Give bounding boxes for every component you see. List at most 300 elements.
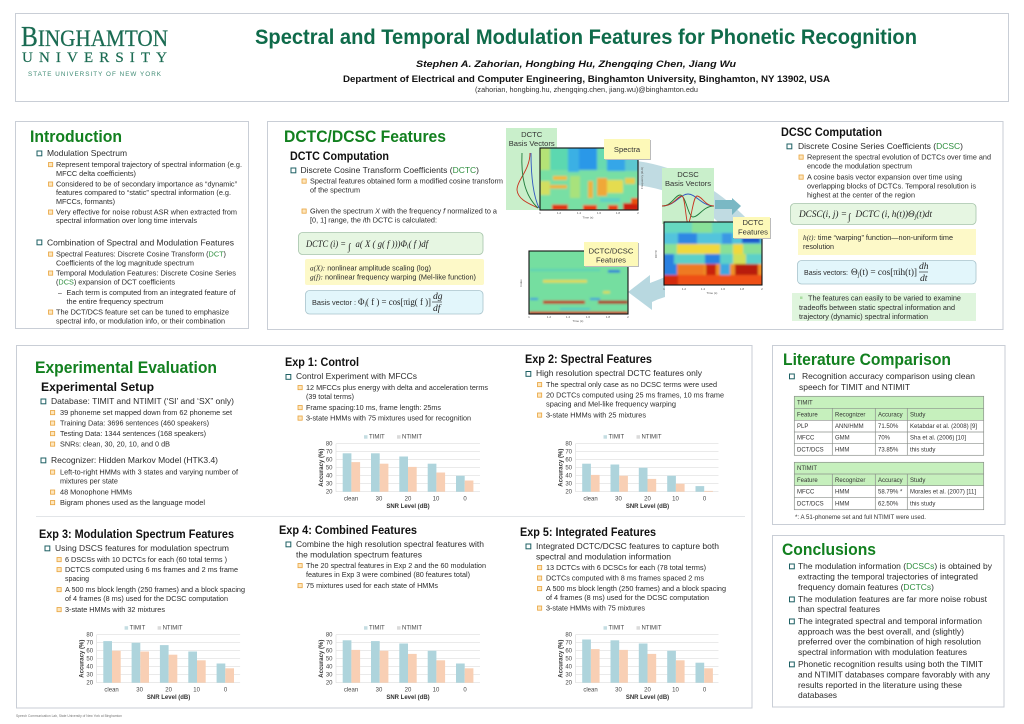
bar chart: Exp 3 accuracy (80, 626, 240, 701)
text block: Exp 1 details: 12 MFCCs plus energy with delta and acceleration terms (306, 385, 489, 392)
text block: DCSC description: Discrete Cosine Series Coefficients ( DCSC) (798, 142, 963, 151)
box: DCSC basis vectors: Basis Vectors (665, 179, 711, 188)
table: TIMIT: MFCC (797, 436, 815, 442)
text block: Exp 3 details (45, 544, 245, 614)
table: TIMIT (794, 396, 984, 455)
bar chart: Exp 5 accuracy: TIMIT (608, 626, 624, 632)
table: NTIMIT: NTIMIT (797, 466, 817, 472)
text block: combination of features: the entire frequency spectrum (66, 299, 164, 306)
spectrogram: DCTC/DCSC features: 1 (528, 315, 530, 319)
formula: DCSC basis vectors: Basis vectors: (804, 270, 848, 277)
text block: Exp 2 details: 20 DCTCs computed using 25 ms frames, 10 ms frame (546, 392, 724, 400)
formula: basis vector (306, 290, 483, 314)
table: TIMIT: 73.85% (878, 448, 899, 454)
bar chart: Exp 2 accuracy: SNR Level (dB) (626, 504, 669, 510)
table: TIMIT: Ketabdar et al. (2008) [9] (910, 424, 977, 430)
text block: database: Testing Data: 1344 sentences (168 speakers) (60, 431, 206, 438)
spectrogram: DCTC/DCSC features: Time (s) (573, 319, 583, 323)
formula: DCSC basis vectors: j (857, 272, 860, 278)
heading: experimental evaluation: Experimental Evaluation (35, 359, 217, 377)
bar chart: Exp 4 accuracy: 50 (326, 657, 333, 663)
bar chart: Exp 5 accuracy: 10 (672, 687, 679, 693)
text block: Exp 3 details: DCTCS computed using 6 ms frames and 2 ms frame (65, 567, 238, 574)
text block: modulation spectrum: MFCC delta coefficients) (56, 171, 136, 178)
text block: Exp 5 details: Integrated DCTC/DCSC features to capture both (536, 542, 719, 551)
bar chart: Exp 1 accuracy: NTIMIT (402, 435, 422, 441)
callout: time warping (798, 229, 976, 255)
bar chart: Exp 3 accuracy: 20 (165, 687, 173, 693)
text block: combination of features: Each term is computed from an integrated feature of (66, 290, 236, 297)
formula: DCTC (298, 232, 483, 254)
spectrogram: DCTC features: Time (s) (707, 291, 717, 295)
footnote: *: A 51-phoneme set and full NTIMIT were used. (795, 515, 926, 521)
text block: Exp 1 details: Frame spacing:10 ms, frame length: 25ms (306, 405, 442, 412)
heading: conclusions: Conclusions (782, 541, 876, 559)
bar chart: Exp 5 accuracy: 80 (565, 633, 573, 639)
spectrogram: spectra: 2 (637, 211, 639, 215)
bar chart: Exp 1 accuracy: 50 (326, 466, 333, 472)
box: DCSC basis vectors (662, 168, 714, 224)
box: DCSC basis vectors: DCSC (677, 170, 699, 179)
bar chart: Exp 3 accuracy: 30 (86, 673, 94, 679)
text block: conclusion 3: approach was the best overall, and (slightly) (798, 628, 964, 636)
text block: Exp 5 details (526, 542, 726, 612)
table: NTIMIT: 62.50% (878, 502, 899, 508)
bar chart: Exp 4 accuracy: 20 (326, 681, 333, 687)
spectrogram: spectra: 1.8 (616, 211, 620, 215)
text block: combination of features: Temporal Modulation Features: Discrete Cosine Series (56, 270, 237, 278)
spectrogram: DCTC features (654, 218, 766, 295)
bar chart: Exp 1 accuracy: 70 (326, 450, 333, 456)
spectrogram: DCTC/DCSC features: 1.6 (586, 315, 590, 319)
heading: introduction: Introduction (30, 128, 122, 146)
text block: recognizer: Recognizer: Hidden Markov Model (HTK3.4) (51, 456, 218, 465)
text block: Exp 4 details: The 20 spectral features in Exp 2 and the 60 modulation (306, 563, 486, 570)
authors: Stephen A. Zahorian, Hongbing Hu, Zhengqing Chen, Jiang Wu (416, 59, 736, 70)
bar chart: Exp 3 accuracy: 40 (86, 665, 94, 671)
text block: DCTC description: Spectral features obtained form a modified cosine transform (310, 178, 503, 186)
bar chart: Exp 3 accuracy: SNR Level (dB) (147, 695, 190, 701)
bar chart: Exp 5 accuracy: 0 (703, 687, 707, 693)
callout: time warping: h(t): time “warping” function—non-uniform time (803, 235, 953, 242)
formula: DCSC: DCSC(i, j) = (798, 209, 847, 220)
label: spectra: Spectra (614, 145, 641, 154)
bar chart: Exp 4 accuracy: 20 (405, 687, 412, 693)
bar chart: Exp 3 accuracy: 80 (86, 633, 94, 639)
bar chart: Exp 1 accuracy: 60 (326, 458, 333, 464)
bar chart: Exp 2 accuracy: Accuracy (%) (558, 449, 564, 487)
bar chart: Exp 2 accuracy: 20 (565, 490, 573, 496)
spectrogram: DCTC features: DCTC (654, 249, 658, 258)
text block: conclusion 4: databases (798, 691, 837, 700)
spectrogram: DCTC features: 1.4 (701, 287, 705, 291)
formula: DCSC: (t)dt (916, 209, 932, 220)
spectrogram: spectra: 1.6 (597, 211, 601, 215)
bar chart: Exp 3 accuracy: 10 (193, 687, 201, 693)
spectrogram: DCTC features: 1.2 (682, 287, 686, 291)
text block: Exp 1 details: 3-state HMMs with 75 mixtures used for recognition (306, 416, 471, 422)
formula: DCTC: ( f )df (409, 239, 429, 250)
bar chart: Exp 3 accuracy: Accuracy (%) (80, 640, 86, 678)
spectrogram: DCTC/DCSC features: 2 (627, 315, 629, 319)
table: NTIMIT: Accuracy (878, 478, 903, 484)
emails: (zahorian, hongbing.hu, zhengqing.chen, jiang.wu)@binghamton.edu (475, 85, 698, 94)
bar chart: Exp 1 accuracy: 0 (463, 496, 467, 502)
bar chart: Exp 5 accuracy: 60 (565, 649, 573, 655)
bar chart: Exp 4 accuracy: 30 (376, 687, 383, 693)
panel: introduction (16, 122, 248, 328)
text block: recognizer: Left-to-right HMMs with 3 states and varying number of (60, 470, 238, 476)
text block: DCSC description (787, 142, 991, 200)
text block: conclusion 1 (790, 562, 993, 592)
table: NTIMIT: this study (910, 502, 935, 508)
text block: Exp 1 details (286, 372, 489, 422)
bar chart: Exp 3 accuracy: 0 (224, 687, 228, 693)
panel: conclusions (772, 536, 1004, 707)
bar chart: Exp 4 accuracy: clean (344, 687, 358, 693)
callout: tradeoffs (792, 293, 976, 321)
bar chart: Exp 3 accuracy: 70 (86, 641, 94, 647)
experiment 2 (525, 354, 724, 510)
heading: DCTC/DCSC features: DCTC/DCSC Features (284, 128, 446, 146)
table: TIMIT: Accuracy (878, 412, 903, 418)
bar chart: Exp 5 accuracy (558, 626, 718, 701)
callout: nonlinear functions: g(f): nonlinear frequency warping (Mel-like function) (310, 274, 476, 282)
table: TIMIT: ANN/HMM (835, 424, 864, 430)
formula: DCSC: j (914, 214, 917, 220)
text block: database: SNRs: clean, 30, 20, 10, and 0 dB (60, 442, 170, 448)
bar chart: Exp 5 accuracy: 50 (565, 657, 573, 663)
text block: Exp 4 details: Combine the high resolution spectral features with (296, 540, 484, 549)
panel: header (16, 14, 1008, 102)
bar chart: Exp 2 accuracy: 40 (565, 474, 573, 480)
formula: DCSC basis vectors (798, 260, 976, 284)
text block: conclusion 4: Phonetic recognition results using both the TIMIT (798, 660, 983, 669)
formula: DCTC: i (407, 244, 409, 250)
bar chart: Exp 1 accuracy: 20 (405, 496, 412, 502)
text block: Exp 3 details: 3-state HMMs with 32 mixtures (65, 607, 166, 614)
text block: Exp 4 details: the modulation spectrum features (296, 550, 422, 560)
bar chart: Exp 5 accuracy: 20 (565, 681, 573, 687)
panel: experimental evaluation (16, 346, 752, 708)
text block: database: Database: TIMIT and NTIMIT (‘SI’ and ‘SX” only) (51, 397, 234, 406)
title: Spectral and Temporal Modulation Features for Phonetic Recognition (255, 26, 917, 49)
callout: tradeoffs: tradeoffs between static spectral information and (799, 305, 955, 312)
table: TIMIT: Study (910, 412, 925, 418)
footer note: Speech Communication Lab, State University of New York at Binghamton (16, 714, 122, 718)
text block: Exp 4 details: features in Exp 3 were combined (80 features total) (306, 572, 470, 579)
label: spectra (604, 139, 651, 160)
text block: combination of features: (DCS) expansion of DCT coefficients (56, 280, 176, 286)
text block: Exp 3 details: of 4 frames (8 ms) used for the DCSC computation (65, 596, 228, 603)
text block: combination of features: spectral info, or modulation info, or their combination (56, 318, 225, 326)
text block: Exp 2 details: High resolution spectral DCTC features only (536, 369, 703, 378)
table: NTIMIT: HMM (835, 502, 849, 508)
heading: Exp 5: Exp 5: Integrated Features (520, 527, 656, 539)
table: NTIMIT: 58.79% * (878, 490, 903, 496)
formula: DCTC: a( X ( g( f )))Φ (356, 240, 412, 250)
bar chart: Exp 2 accuracy: 0 (703, 496, 707, 502)
table: NTIMIT: Feature (797, 478, 818, 484)
formula: DCSC basis vectors: dt (920, 274, 928, 284)
table: NTIMIT (794, 462, 984, 510)
logo: Binghamton University (21, 22, 168, 78)
text block: comparison intro: speech for TIMIT and NTIMIT (799, 383, 910, 392)
formula: DCSC basis vectors: (t) = cos[πih(t)] (859, 267, 917, 278)
bar chart: Exp 3 accuracy: 50 (86, 657, 94, 663)
text block: modulation spectrum (37, 149, 242, 225)
text block: combination of features (37, 238, 237, 326)
text block: Exp 5 details: 3-state HMMs with 75 mixtures (546, 606, 646, 612)
formula: basis vector: Basis vector : (312, 300, 356, 307)
bar chart: Exp 2 accuracy: 30 (565, 482, 573, 488)
logo: Binghamton University: BINGHAMTON (21, 22, 168, 53)
formula: DCTC: ∫ (347, 243, 352, 253)
bar chart: Exp 1 accuracy: SNR Level (dB) (386, 504, 430, 510)
bar chart: Exp 2 accuracy: 70 (565, 450, 573, 456)
text block: modulation spectrum: Considered to be of secondary importance as “dynamic” (56, 182, 238, 188)
bar chart: Exp 5 accuracy: Accuracy (%) (558, 640, 564, 678)
experiment 4 (279, 525, 486, 701)
heading: literature comparison: Literature Comparison (783, 351, 951, 369)
bar chart: Exp 5 accuracy: 70 (565, 641, 573, 647)
text block: database: Training Data: 3696 sentences (460 speakers) (60, 420, 209, 428)
table: NTIMIT: Study (910, 478, 925, 484)
formula: basis vector: ( f ) = cos[πig( f )] (366, 297, 431, 308)
bar chart: Exp 1 accuracy: Accuracy (%) (319, 449, 325, 487)
text block: conclusion 4 (790, 660, 991, 700)
bar chart: Exp 2 accuracy: clean (583, 496, 598, 502)
text block: combination of features: Combination of Spectral and Modulation Features (47, 238, 234, 248)
text block: conclusion 4: results reported in the literature using these (798, 681, 962, 690)
text block: conclusion 3: spectral information with modulation features (798, 648, 967, 657)
diagram: feature pipeline (506, 128, 771, 323)
bar chart: Exp 2 accuracy: TIMIT (608, 435, 624, 441)
text block: conclusion 1: frequency domain features ( DCTCs) (798, 583, 934, 592)
bar chart: Exp 3 accuracy: clean (104, 687, 119, 693)
table: TIMIT: Sha et al. (2006) [10] (910, 436, 966, 442)
box: DCTC basis vectors (506, 128, 557, 210)
text block: conclusion 2 (790, 595, 988, 614)
formula: DCSC: DCTC (i, h(t))Θ (856, 210, 917, 220)
bar chart: Exp 3 accuracy: 30 (136, 687, 144, 693)
text block: combination of features: Spectral Features: Discrete Cosine Transform ( DCT) (56, 252, 226, 258)
bar chart: Exp 2 accuracy: 60 (565, 458, 573, 464)
bar chart: Exp 1 accuracy: 30 (326, 482, 333, 488)
subheading: experimental setup: Experimental Setup (41, 382, 154, 394)
text block: Exp 1 details: (39 total terms) (306, 394, 354, 401)
bar chart: Exp 2 accuracy (558, 435, 718, 510)
table: NTIMIT: HMM (835, 490, 849, 496)
bar chart: Exp 2 accuracy: 30 (615, 496, 622, 502)
bar chart: Exp 1 accuracy: 30 (376, 496, 383, 502)
spectrogram: spectra: 1.4 (577, 211, 581, 215)
text block: modulation spectrum: spectral information over long time intervals (56, 218, 198, 225)
formula: DCTC: DCTC (i) = (305, 239, 346, 250)
panel: DCTC/DCSC features (268, 122, 1003, 330)
text block: modulation spectrum: features compared to “static” spectral information (e.g. (56, 190, 231, 197)
formula: basis vector: df (433, 303, 442, 314)
text block: Exp 2 details: 3-state HMMs with 25 mixtures (546, 412, 647, 420)
text block: recognizer: 48 Monophone HMMs (60, 490, 133, 496)
text block: recognizer: mixtures per state (60, 478, 118, 486)
spectrogram: spectra: Time (s) (583, 216, 593, 220)
text block: Exp 3 details: 6 DSCSs with 10 DCTCs for each (60 total terms ) (65, 557, 227, 564)
text block: DCSC description: highest at the center of the region (807, 192, 915, 200)
text block: DCSC description: A cosine basis vector expansion over time using (807, 174, 962, 182)
text block: Exp 5 details: A 500 ms block length (250 frames) and a block spacing (546, 586, 726, 593)
text block: Exp 2 details: The spectral only case as no DCSC terms were used (546, 382, 717, 389)
label: DCTC/DCSC features: Features (596, 256, 626, 264)
bar chart: Exp 4 accuracy: Accuracy (%) (319, 640, 325, 678)
callout: time warping: resolution (803, 244, 834, 251)
label: DCTC/DCSC features (584, 242, 639, 267)
formula: DCSC: ∫ (847, 213, 852, 223)
bar chart: Exp 1 accuracy: TIMIT (369, 435, 385, 441)
text block: database: 39 phoneme set mapped down from 62 phoneme set (60, 410, 232, 417)
label: DCTC/DCSC features: DCTC/DCSC (589, 246, 634, 256)
bar chart: Exp 4 accuracy: NTIMIT (402, 626, 422, 632)
table: TIMIT: HMM (835, 448, 849, 454)
bar chart: Exp 4 accuracy (319, 626, 480, 701)
text block: Exp 5 details: of 4 frames (8 ms) used for the DCSC computation (546, 595, 709, 602)
arrow: DCSC basis to features (715, 198, 741, 215)
spectrogram: DCTC features: 2 (761, 287, 763, 291)
label: DCTC features: Features (738, 228, 768, 236)
text block: DCSC description: overlapping blocks of DCTCs. Temporal resolution is (807, 184, 977, 190)
formula: basis vector: i (364, 302, 366, 308)
spectrogram: DCTC/DCSC features: 1.2 (547, 315, 551, 319)
text block: modulation spectrum: Modulation Spectrum (47, 149, 127, 158)
bar chart: Exp 3 accuracy: TIMIT (130, 626, 146, 632)
experiment 5 (520, 527, 726, 701)
text block: Exp 5 details: DCTCs computed with 8 ms frames spaced 2 ms (546, 576, 705, 582)
text block: conclusion 2: than spectral features (798, 605, 880, 614)
bar chart: Exp 5 accuracy: 20 (644, 687, 651, 693)
department: Department of Electrical and Computer Engineering, Binghamton University, Binghamton, NY 13902, USA (343, 74, 830, 85)
bar chart: Exp 4 accuracy: 0 (463, 687, 467, 693)
label: DCTC features: DCTC (742, 218, 764, 227)
text block: DCTC description: of the spectrum (310, 188, 360, 194)
spectrogram: DCTC features: 1.6 (721, 287, 725, 291)
box: DCTC basis vectors: Basis Vectors (509, 139, 555, 148)
heading: Exp 4: Exp 4: Combined Features (279, 525, 417, 537)
bar chart: Exp 2 accuracy: NTIMIT (642, 435, 662, 441)
text block: comparison intro (790, 372, 975, 392)
heading: Exp 3: Exp 3: Modulation Spectrum Features (39, 529, 234, 541)
bar chart: Exp 4 accuracy: 40 (326, 665, 333, 671)
callout: tradeoffs: trajectory (dynamic) spectral information (799, 314, 928, 321)
panel: literature comparison (772, 346, 1005, 524)
subheading: DCTC computation: DCTC Computation (290, 151, 389, 163)
table: TIMIT: DCT/DCS (797, 448, 824, 454)
spectrogram: spectra: Frequency (kHz) (640, 167, 644, 189)
text block: combination of features: Coefficients of the log magnitude spectrum (56, 260, 194, 268)
bar chart: Exp 4 accuracy: TIMIT (369, 626, 385, 632)
text block: conclusion 2: The modulation features are far more noise robust (798, 595, 988, 604)
bar chart: Exp 4 accuracy: SNR Level (dB) (386, 695, 430, 701)
bar chart: Exp 1 accuracy: clean (344, 496, 358, 502)
bar chart: Exp 5 accuracy: SNR Level (dB) (626, 695, 669, 701)
bar chart: Exp 2 accuracy: 20 (644, 496, 651, 502)
text block: DCTC description: [0, 1] range, the ith DCTC is calculated: (310, 218, 437, 224)
callout: tradeoffs: The features can easily to be varied to examine (808, 296, 961, 302)
callout: nonlinear functions: a(X): nonlinear amplitude scaling (log) (310, 266, 431, 272)
text block: conclusion 3: The integrated spectral and temporal information (798, 617, 982, 626)
text block: DCTC description: Given the spectrum X with the frequency f normalized to a (310, 208, 497, 216)
table: TIMIT: Feature (797, 412, 818, 418)
label: DCTC features (733, 217, 771, 239)
text block: Exp 1 details: Control Experiment with MFCCs (296, 372, 417, 381)
table: TIMIT: PLP (797, 424, 808, 430)
text block: Exp 4 details (286, 540, 486, 590)
text block: conclusion 1: The modulation information ( DCSCs) is obtained by (798, 562, 993, 571)
spectrogram: DCTC/DCSC features (519, 247, 632, 323)
bar chart: Exp 1 accuracy: 20 (326, 490, 333, 496)
callout: nonlinear functions (305, 259, 484, 285)
spectrogram: DCTC features: 1.8 (740, 287, 744, 291)
bar chart: Exp 5 accuracy: 30 (565, 673, 573, 679)
bar chart: Exp 5 accuracy: 30 (615, 687, 622, 693)
text block: conclusion 3 (790, 617, 982, 657)
bar chart: Exp 5 accuracy: NTIMIT (642, 626, 662, 632)
bar chart: Exp 2 accuracy: 80 (565, 442, 573, 448)
logo: Binghamton University: UNIVERSITY (22, 50, 167, 66)
spectrogram: DCTC/DCSC features: Index (519, 279, 523, 287)
text block: combination of features: The DCT/DCS feature set can be tuned to emphasize (56, 310, 229, 316)
formula: DCSC basis vectors: dh (919, 262, 929, 272)
bar chart: Exp 1 accuracy: 40 (326, 474, 333, 480)
text block: conclusion 1: extracting the temporal trajectories of integrated (798, 572, 978, 582)
table: NTIMIT: Morales et al. (2007) [11] (910, 490, 976, 496)
bar chart: Exp 3 accuracy: 20 (86, 681, 94, 687)
text block: DCSC description: encode the modulation spectrum (807, 164, 912, 170)
text block: Exp 3 details: Using DSCS features for modulation spectrum (55, 544, 229, 553)
spectrogram: spectra: 1.2 (557, 211, 561, 215)
table: TIMIT: this study (910, 448, 935, 454)
table: NTIMIT: DCT/DCS (797, 502, 824, 508)
text block: combination of features: – (58, 290, 62, 297)
bar chart: Exp 4 accuracy: 30 (326, 673, 333, 679)
bar chart: Exp 4 accuracy: 10 (433, 687, 440, 693)
table: NTIMIT: MFCC (797, 490, 815, 496)
arrow: DCTC features to DCTC/DCSC features (628, 275, 665, 310)
text block: DCTC description (291, 166, 503, 224)
formula: basis vector: Φ (358, 298, 365, 308)
text block: modulation spectrum: MFCCs, formants) (56, 199, 115, 206)
table: TIMIT: Recognizer (835, 412, 865, 418)
logo: Binghamton University: STATE UNIVERSITY OF NEW YORK (28, 71, 162, 78)
heading: Exp 1: Exp 1: Control (285, 357, 359, 369)
bar chart: Exp 4 accuracy: 80 (326, 633, 333, 639)
text block: DCTC description: Discrete Cosine Transform Coefficients ( DCTC) (300, 166, 479, 175)
formula: basis vector: dg (433, 292, 443, 302)
bar chart: Exp 1 accuracy: 80 (326, 442, 333, 448)
text block: Exp 3 details: spacing (65, 576, 89, 583)
table: TIMIT: 71.50% (878, 424, 899, 430)
bar chart: Exp 2 accuracy: 10 (672, 496, 679, 502)
text block: Exp 3 details: A 500 ms block length (250 frames) and a block spacing (65, 587, 245, 594)
experiment 1 (285, 357, 489, 510)
table: TIMIT: GMM (835, 436, 850, 442)
text block: Exp 2 details (526, 369, 724, 420)
table: TIMIT: 70% (878, 436, 891, 442)
text block: database (41, 397, 234, 448)
text block: Exp 2 details: spacing and Mel-like frequency warping (546, 402, 676, 408)
table: TIMIT: TIMIT (797, 400, 813, 406)
subheading: DCSC computation: DCSC Computation (781, 127, 882, 139)
bar chart: Exp 4 accuracy: 70 (326, 641, 333, 647)
